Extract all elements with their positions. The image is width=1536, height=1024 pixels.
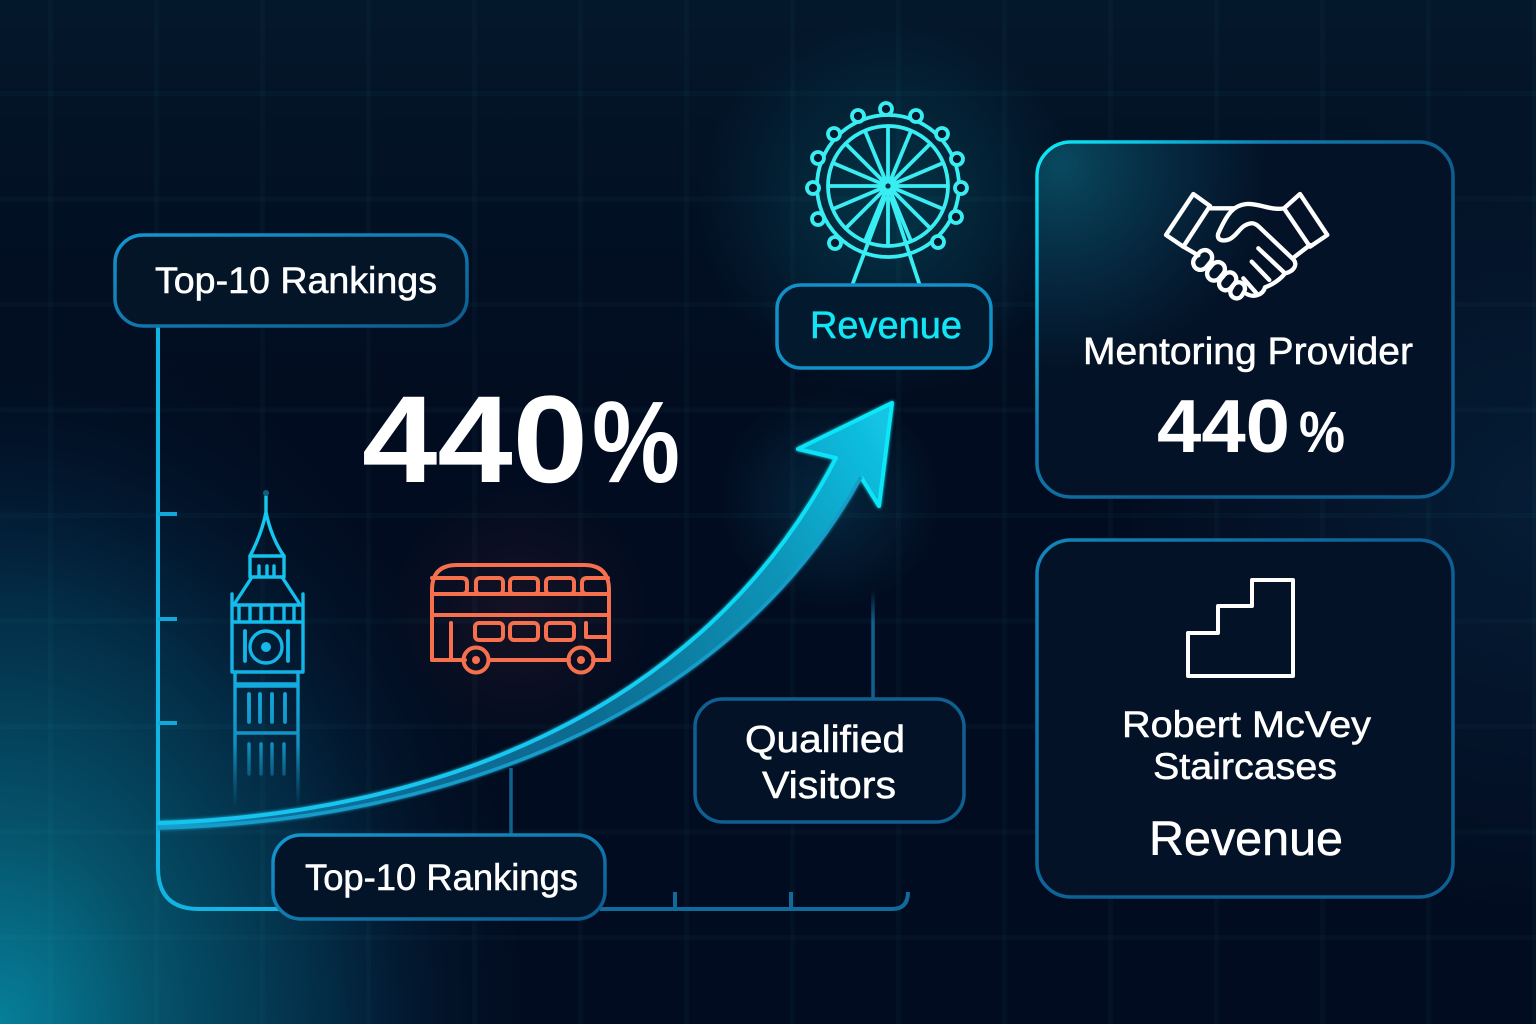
- growth arrow: [158, 403, 892, 828]
- panel: Robert McVey Staircases: [1037, 540, 1453, 897]
- label: Qualified Visitors: [695, 699, 964, 822]
- label: Top-10 Rankings (top): [115, 235, 467, 326]
- big number: 440%: [362, 371, 680, 509]
- icon: handshake: [1166, 194, 1327, 301]
- big number: 440%: %: [592, 377, 680, 507]
- panel: Mentoring Provider: 440: [1157, 384, 1290, 468]
- connector: visitors label to axis: [871, 590, 875, 698]
- icon: London Eye wheel: [807, 103, 967, 283]
- label: Top-10 Rankings (top): Top-10 Rankings: [155, 260, 437, 301]
- panel: Robert McVey Staircases: Revenue: [1149, 813, 1343, 866]
- panel: Robert McVey Staircases: Staircases: [1153, 746, 1337, 787]
- big number: 440%: 440: [362, 371, 588, 509]
- label: Top-10 Rankings (bottom): [273, 835, 605, 919]
- icon: Big Ben tower: [232, 490, 303, 808]
- label: Revenue: Revenue: [810, 305, 962, 347]
- icon: staircase: [1188, 580, 1293, 676]
- panel: Robert McVey Staircases: Robert McVey: [1122, 704, 1372, 745]
- icon: red double-decker bus: [432, 565, 609, 672]
- panel: Mentoring Provider: %: [1299, 400, 1345, 465]
- label: Qualified Visitors: Visitors: [762, 765, 896, 807]
- label: Top-10 Rankings (bottom): Top-10 Rankings: [305, 857, 578, 898]
- connector: rankings label to curve: [509, 768, 513, 834]
- label: Revenue: [777, 285, 991, 368]
- chart axes with tick marks: [158, 327, 908, 909]
- label: Qualified Visitors: Qualified: [745, 719, 905, 761]
- panel: Mentoring Provider: [1037, 142, 1453, 497]
- panel: Mentoring Provider: Mentoring Provider: [1083, 331, 1413, 373]
